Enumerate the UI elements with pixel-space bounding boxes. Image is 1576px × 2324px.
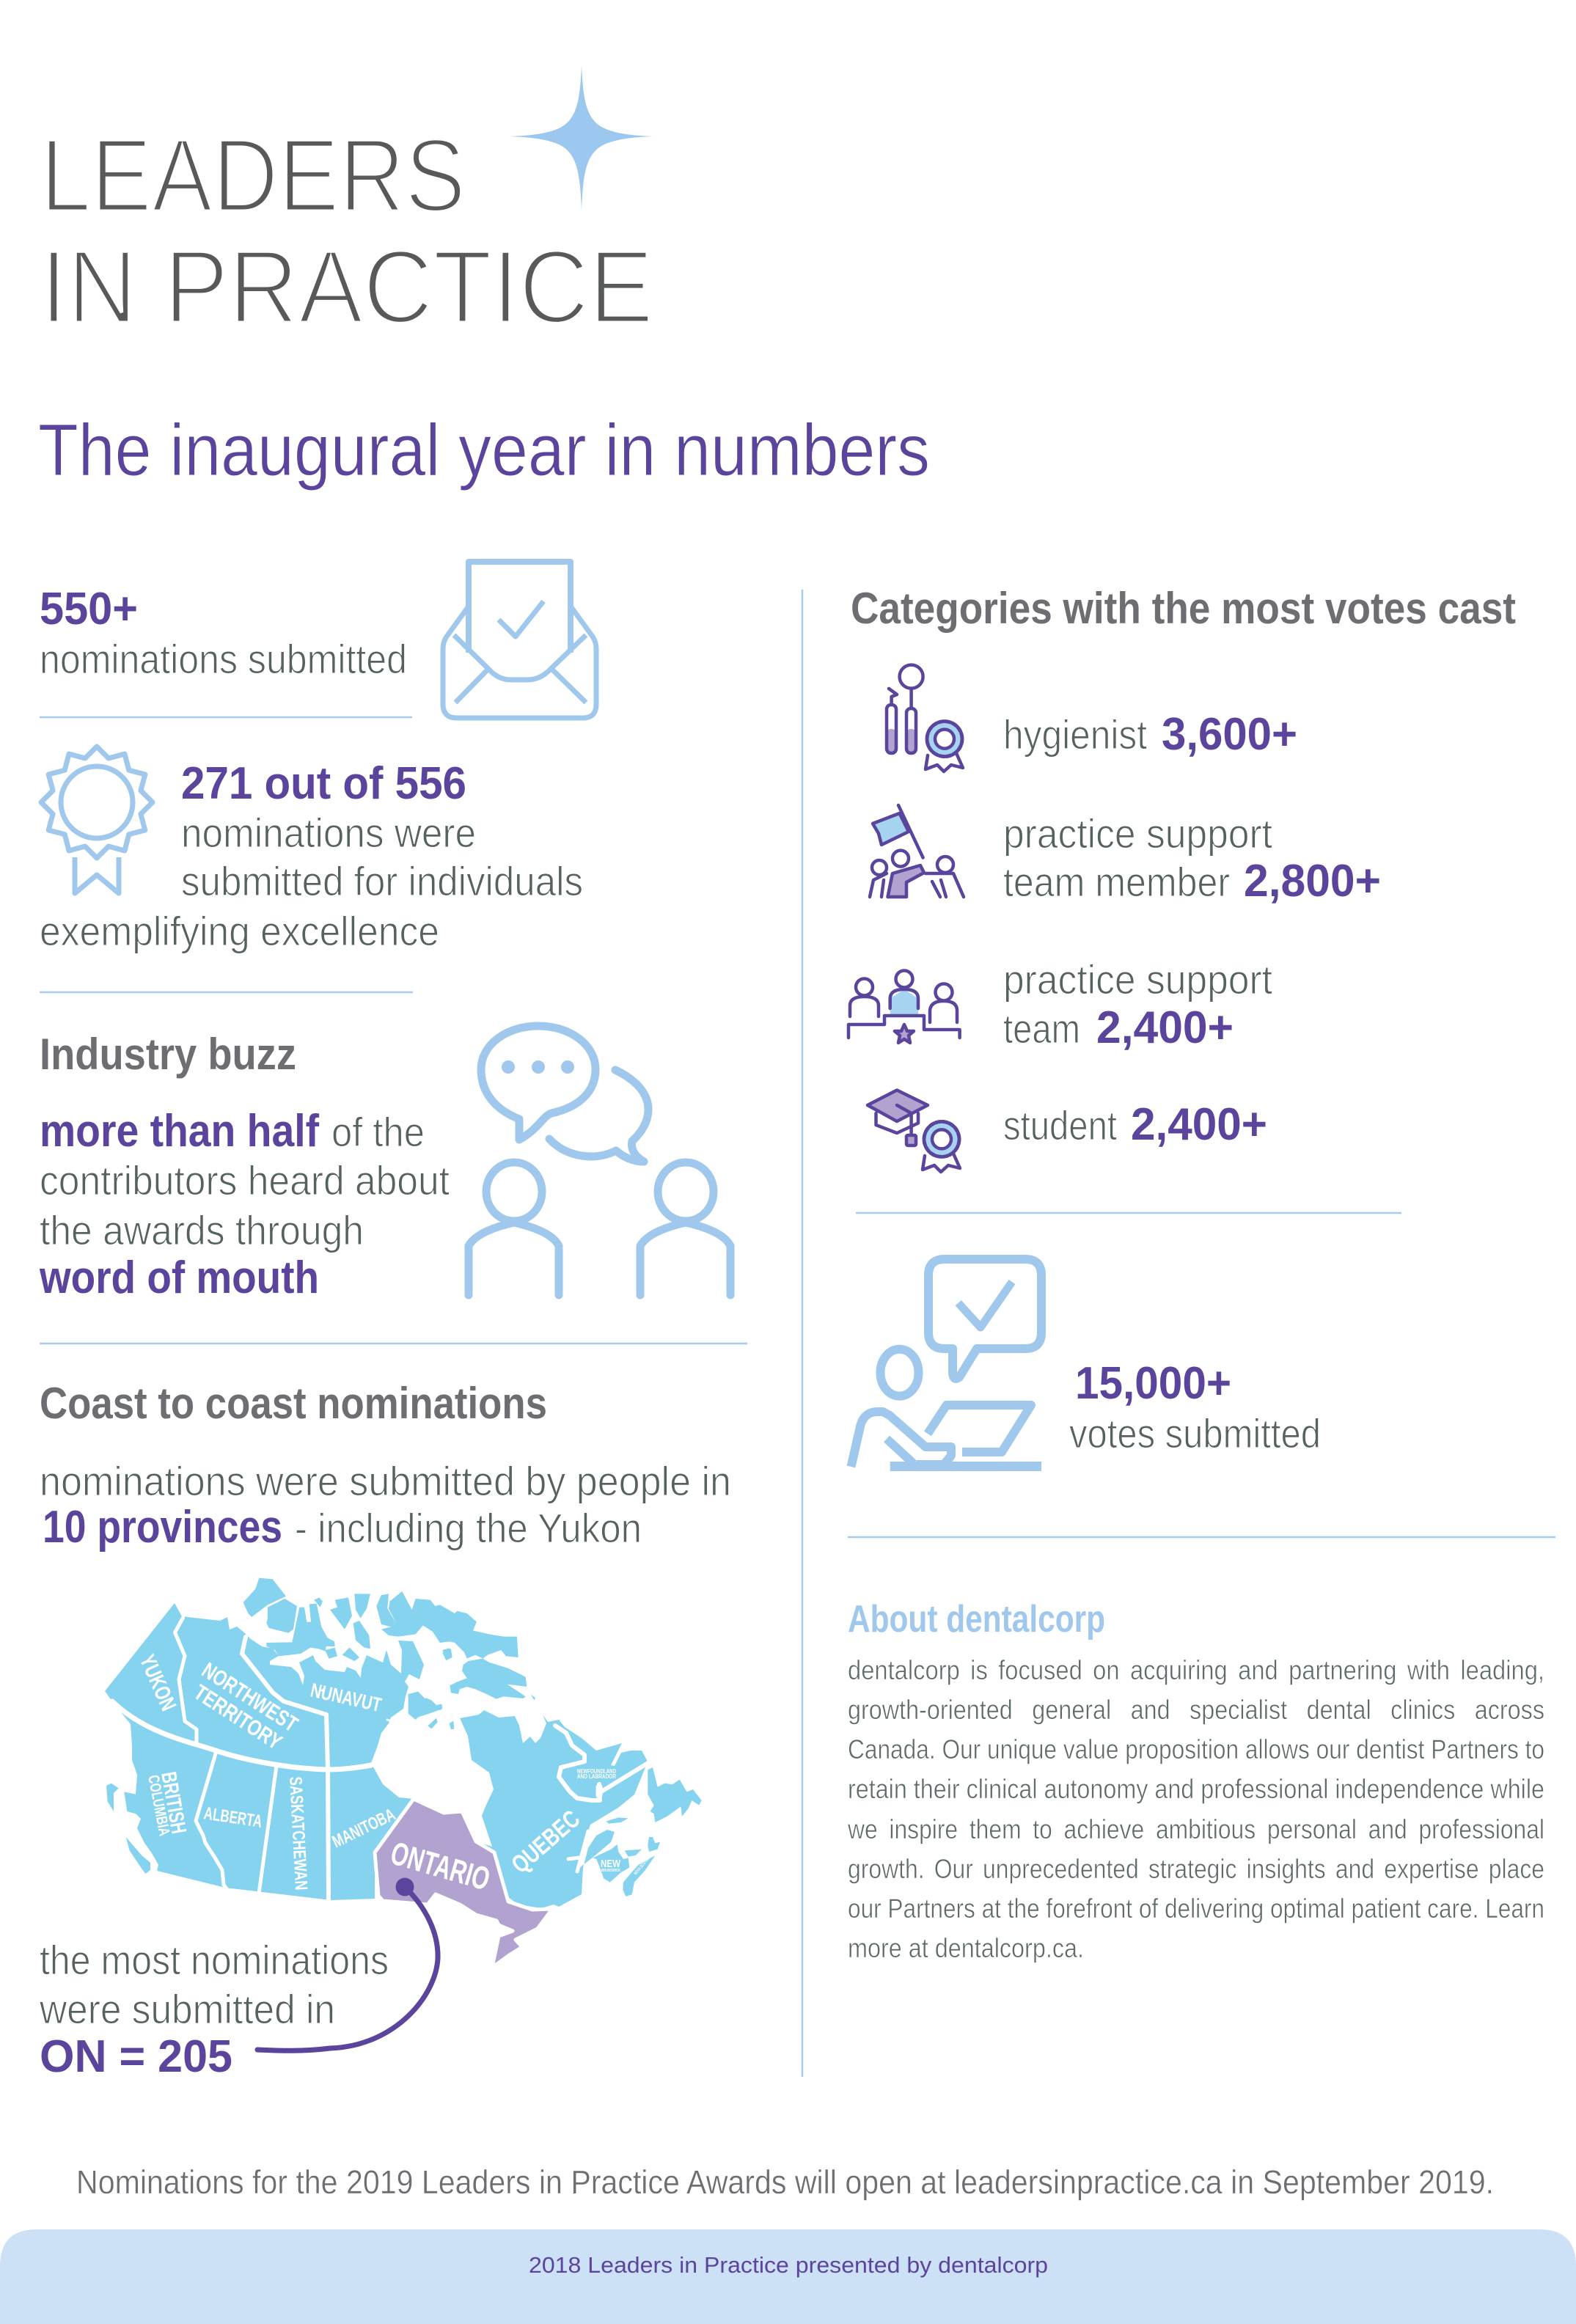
stat: 271 out of 556: 271 out of 556 xyxy=(181,758,466,809)
text: 10 provinces including the yukon xyxy=(43,1502,642,1553)
title block xyxy=(40,65,653,345)
map labels: NEWFOUNDLAND xyxy=(577,1768,616,1775)
map labels: NEW xyxy=(601,1858,621,1870)
text: practice support team member 2,800+: team member xyxy=(1003,859,1230,905)
text: practice support team 2,400+: 2,400+ xyxy=(1096,1002,1234,1053)
text: student 2,400+ xyxy=(1003,1099,1267,1150)
text: practice support team 2,400+ xyxy=(1003,956,1272,1053)
map labels: ALBERTA xyxy=(202,1803,263,1832)
text: exemplifying excellence: exemplifying excellence xyxy=(40,908,439,954)
text: about paragraph xyxy=(847,1655,1544,1963)
map labels: SASKATCHEWAN xyxy=(285,1776,311,1891)
label: votes submitted: votes submitted xyxy=(1069,1410,1321,1456)
baffin island south xyxy=(425,1648,535,1710)
icon: speech dots xyxy=(502,1060,574,1074)
icon: graduation cap with badge xyxy=(868,1090,960,1172)
icon: dental tools with badge xyxy=(887,665,963,771)
text: practice support team 2,400+: practice support xyxy=(1003,956,1272,1002)
text: student 2,400+: student xyxy=(1003,1102,1117,1148)
map labels: COLUMBIA xyxy=(144,1774,173,1837)
panel: industry buzz xyxy=(39,1026,730,1303)
stat: 550+: 550+ xyxy=(40,584,138,634)
panel: votes submitted xyxy=(851,1259,1321,1471)
icon: envelope with check xyxy=(443,562,596,718)
text: 10 provinces including the yukon: 10 provinces xyxy=(43,1502,282,1553)
icon: team on podium xyxy=(849,971,960,1043)
stat: on = 205: ON = 205 xyxy=(40,2031,232,2082)
title: in practice: IN PRACTICE xyxy=(40,229,653,345)
callout: ontario pointer line xyxy=(257,1877,438,2050)
text: the most nominations: the most nominations xyxy=(40,1937,389,1983)
text: practice support team member 2,800+: 2,800+ xyxy=(1244,856,1381,906)
text: contributors heard about: contributors heard about xyxy=(40,1157,450,1203)
panel: coast to coast nominations xyxy=(39,1379,731,2082)
heading: industry buzz: Industry buzz xyxy=(40,1030,296,1079)
pacific islands xyxy=(106,1784,150,1874)
stat: 15,000+: 15,000+ xyxy=(1075,1358,1231,1409)
text: more than half of the: of the xyxy=(331,1109,425,1155)
text: practice support team 2,400+: team xyxy=(1003,1005,1080,1052)
text: student 2,400+: 2,400+ xyxy=(1131,1099,1267,1150)
map of canada xyxy=(105,1578,702,1968)
map labels: TERRITORY xyxy=(189,1680,286,1755)
icon: team raising flag xyxy=(870,805,964,897)
text: nominations were: nominations were xyxy=(181,810,476,856)
text: word of mouth: word of mouth xyxy=(39,1253,319,1303)
text: practice support team member 2,800+ xyxy=(1003,810,1381,906)
map labels: BRITISH xyxy=(156,1770,190,1836)
text: hygienist 3,600+: hygienist xyxy=(1003,711,1147,758)
icon: person voting on laptop xyxy=(851,1259,1041,1471)
panel: 271 out of 556 xyxy=(40,747,583,954)
text: were submitted in: were submitted in xyxy=(39,1986,335,2032)
map labels xyxy=(135,1651,650,1898)
footer band xyxy=(0,2229,1576,2324)
map labels: YUKON xyxy=(135,1651,180,1715)
panel: categories with the most votes cast xyxy=(849,584,1516,1172)
text: hygienist 3,600+ xyxy=(1003,709,1297,760)
text: the awards through: the awards through xyxy=(40,1207,364,1253)
panel: about dentalcorp xyxy=(847,1598,1544,1963)
map labels: MANITOBA xyxy=(329,1805,398,1852)
text: about paragraph: more at dentalcorp.ca. xyxy=(848,1933,1084,1963)
atlantic provinces xyxy=(593,1767,702,1896)
label: nominations submitted: nominations submitted xyxy=(40,636,407,682)
footer credit: 2018 Leaders in Practice presented by dentalcorp xyxy=(529,2252,1048,2278)
text: hygienist 3,600+: 3,600+ xyxy=(1162,709,1297,760)
text: nominations by people: nominations were submitted by people in xyxy=(40,1458,731,1504)
map labels: AND LABRADOR xyxy=(577,1773,616,1780)
title: leaders: LEADERS xyxy=(40,117,466,234)
icon: two people talking xyxy=(469,1026,730,1295)
map labels: NOVA SCOTIA xyxy=(634,1858,650,1876)
icon: four-point star xyxy=(510,65,653,210)
heading: coast to coast nominations: Coast to coast nominations xyxy=(40,1379,547,1428)
mainland and quebec xyxy=(105,1603,647,1908)
province borders xyxy=(112,1618,647,1901)
text: submitted for individuals: submitted for individuals xyxy=(181,858,583,904)
ontario highlighted xyxy=(375,1799,552,1968)
heading: about dentalcorp: About dentalcorp xyxy=(848,1598,1105,1641)
subtitle heading: The inaugural year in numbers xyxy=(38,409,930,491)
map labels: NORTHWEST xyxy=(197,1658,302,1737)
text: practice support team member 2,800+: practice support xyxy=(1003,810,1272,857)
text: more than half of the: more than half xyxy=(40,1106,319,1156)
map labels: QUEBEC xyxy=(506,1805,585,1879)
map labels: ONTARIO xyxy=(386,1836,494,1898)
panel: nominations submitted xyxy=(40,562,596,718)
map labels: BRUNSWICK xyxy=(601,1869,620,1873)
icon: award rosette xyxy=(41,747,153,893)
arctic islands xyxy=(243,1578,518,1729)
map labels: NUNAVUT xyxy=(309,1679,384,1716)
text: 10 provinces including the yukon: - including the Yukon xyxy=(295,1505,642,1551)
